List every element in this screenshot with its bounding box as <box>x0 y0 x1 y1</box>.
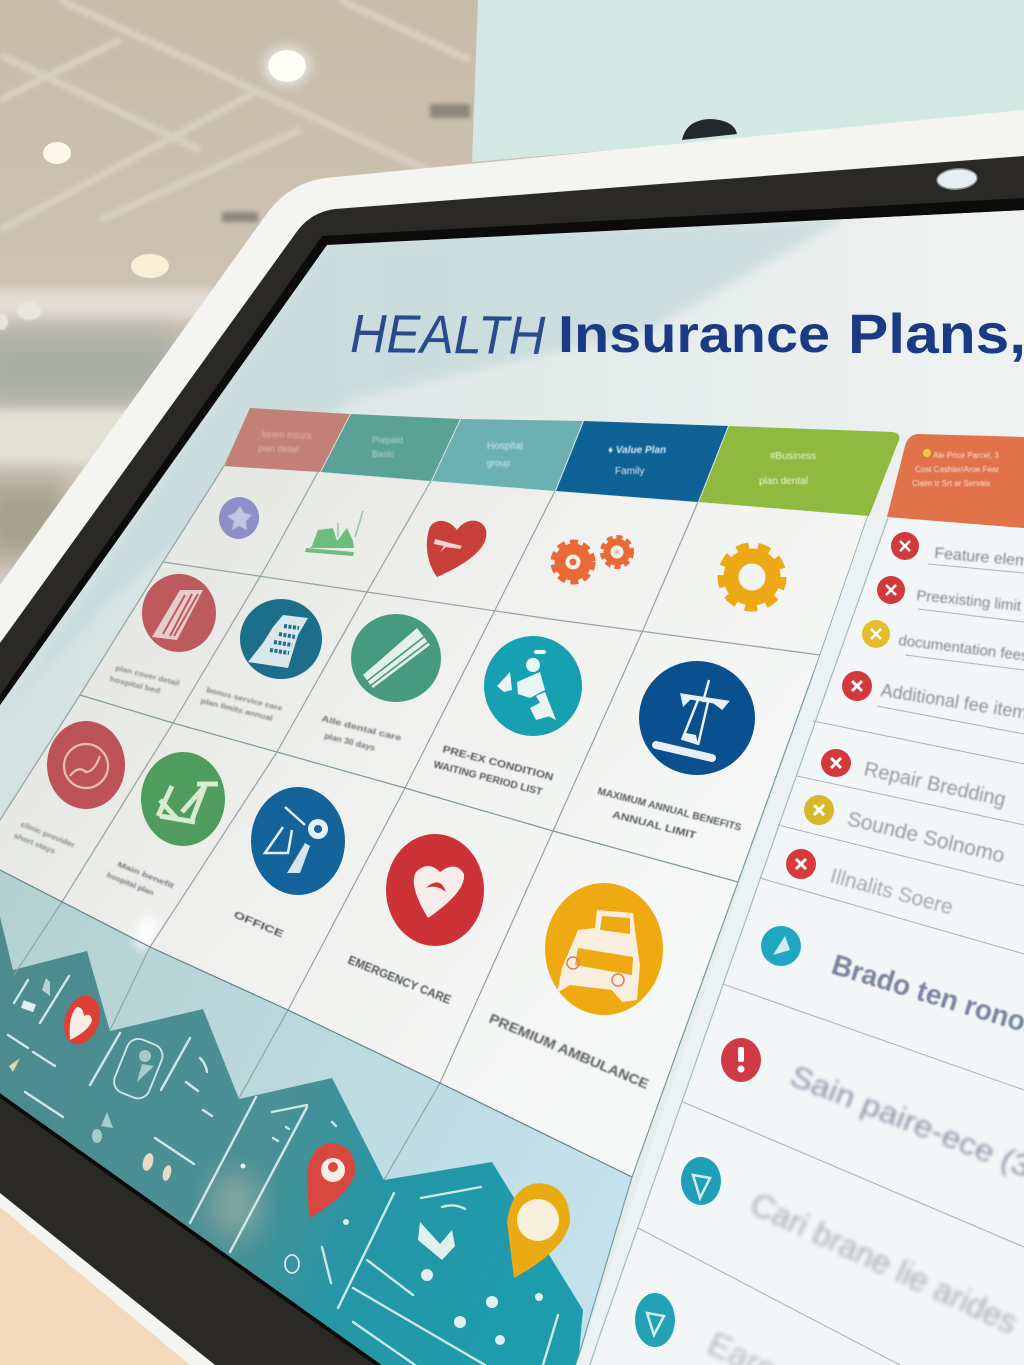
header cell: teal <box>432 419 583 491</box>
header cell: teal: group <box>487 458 510 468</box>
list item 2: Preexisting limit <box>916 587 1023 615</box>
floor <box>0 1207 190 1365</box>
icon: red heart <box>427 521 486 577</box>
caption: short stays <box>13 833 56 856</box>
list item 10 <box>681 1157 1024 1341</box>
caption: PREMIUM AMBULANCE <box>487 1010 651 1092</box>
gutter between table and right column <box>576 516 888 1365</box>
header cell: green <box>699 426 899 516</box>
list item 7 <box>786 849 955 919</box>
list item 6: Sounde Solnomo <box>845 808 1007 868</box>
icon: teal circle with document <box>240 599 322 679</box>
caption: EMERGENCY CARE <box>346 953 453 1007</box>
caption: PRE-EX CONDITION <box>441 743 555 783</box>
caption: MAXIMUM ANNUAL BENEFITS <box>596 786 743 834</box>
table body cells <box>0 466 868 1177</box>
icon: red circle with heart <box>386 834 484 946</box>
list item 6 <box>804 795 1007 868</box>
bottom band with mountain skyline <box>0 870 632 1365</box>
icon: green chart <box>305 511 363 556</box>
caption <box>320 715 402 752</box>
caption: bonus service care <box>206 687 283 713</box>
skyline line art <box>8 976 558 1365</box>
header cell: navy: ♦ Value Plan <box>608 445 666 456</box>
list item 7: Illnalits Soere <box>828 865 955 919</box>
list item 5: Repair Bredding <box>862 758 1008 811</box>
header cell: green: #Business <box>770 451 816 462</box>
list item 4 <box>842 671 1024 723</box>
list item 10: Cari brane lie arides <box>745 1185 1024 1341</box>
list item 8 <box>761 926 1024 1043</box>
caption: ANNUAL LIMIT <box>611 810 697 842</box>
caption: clinic provider <box>19 821 76 850</box>
right column panel <box>590 434 1024 1365</box>
header cell: navy: Family <box>615 466 644 477</box>
icon: aqua circle with figure <box>484 636 582 736</box>
orange panel header <box>887 434 1024 528</box>
title: Plans, <box>848 302 1024 365</box>
icon: yellow gear <box>722 547 782 607</box>
list item 3 <box>862 620 1024 665</box>
icon: green circle <box>141 752 225 846</box>
title: Insurance <box>558 306 830 364</box>
list item 9: Sain paire-ece (3 <box>785 1058 1024 1184</box>
caption: hospital bed <box>109 676 161 695</box>
caption <box>109 666 180 694</box>
icon: rose circle <box>142 574 216 652</box>
caption: plan limits annual <box>200 698 273 723</box>
header cell: rose <box>224 408 350 472</box>
icon: two orange gears <box>553 537 632 582</box>
caption <box>106 861 174 896</box>
header cell: sea green <box>321 414 460 481</box>
row separators <box>638 564 1024 1365</box>
caption: OFFICE <box>232 910 285 941</box>
title <box>352 312 1022 362</box>
list item 5 <box>821 749 1008 811</box>
header cell: rose: lorem insura <box>262 429 312 441</box>
header cell: rose: plan detail <box>258 443 299 454</box>
header cell: navy <box>556 421 728 502</box>
list item 1 <box>891 532 1024 570</box>
caption: Alle dental care <box>321 714 403 743</box>
header cell: teal: Hospital <box>487 441 523 452</box>
icon: rose clock circle <box>47 721 125 809</box>
icon: navy circle with tool <box>639 661 755 775</box>
caption <box>200 686 283 724</box>
list item 11 <box>635 1293 783 1365</box>
header cell: sea green: Basic <box>372 449 395 459</box>
caption: WAITING PERIOD LIST <box>432 758 544 798</box>
icon: red heart pin <box>64 996 100 1044</box>
object behind kiosk <box>682 119 737 140</box>
caption <box>14 822 76 854</box>
ceiling lights <box>0 45 311 330</box>
caption: plan cover detail <box>115 665 180 688</box>
icon: yellow location pin <box>507 1183 570 1278</box>
icon: red location pin <box>307 1143 355 1218</box>
caption: Main benefit <box>116 860 176 891</box>
caption: hospital plan <box>105 870 156 897</box>
table header <box>224 408 899 516</box>
caption <box>434 744 554 796</box>
list item 2 <box>877 576 1023 615</box>
orange panel header: Cost Cashier/Aroe Fear <box>915 465 999 474</box>
icon: blue circle with instrument <box>251 787 345 895</box>
title: HEALTH <box>350 304 546 366</box>
table grid lines <box>0 466 868 1365</box>
caption: plan 30 days <box>323 731 377 753</box>
icon: green circle with bandage <box>351 614 441 702</box>
header cell: green: plan dental <box>759 476 808 487</box>
orange panel header: Ale Price Parcel, 3 <box>933 451 999 460</box>
icon: yellow circle with car <box>545 883 663 1015</box>
background wall panel <box>472 0 1024 162</box>
icon: star badge <box>218 497 260 539</box>
orange panel header: Claim tr Srt ar Servais <box>912 479 990 488</box>
cell captions <box>13 664 743 1092</box>
list item 9 <box>721 1038 1024 1184</box>
header cell: sea green: Prepaid <box>372 435 403 445</box>
screen light-blue corner wedge <box>42 219 842 666</box>
